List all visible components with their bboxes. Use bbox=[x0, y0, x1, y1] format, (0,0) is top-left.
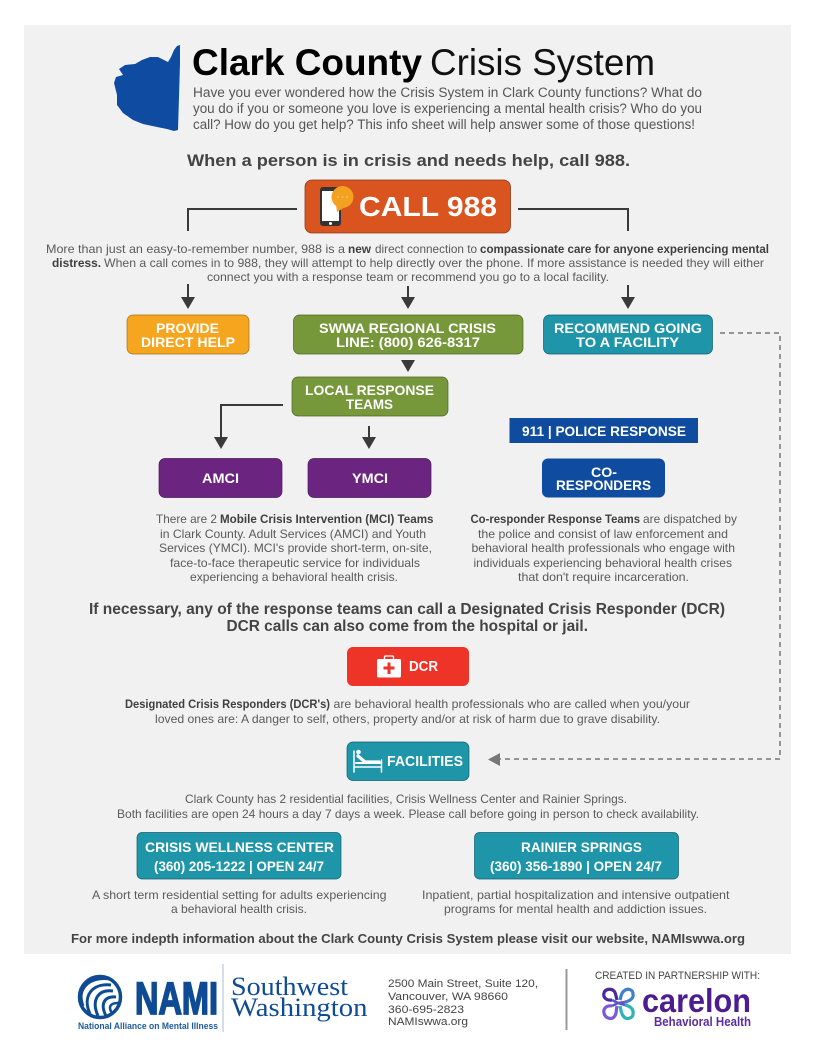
box: crisis wellness center: (360) 205-1222 | OPEN 24/7 bbox=[154, 858, 324, 874]
box: facilities bbox=[347, 742, 469, 780]
box: local response teams: TEAMS bbox=[346, 396, 393, 412]
text: more information: For more indepth information about the Clark County Crisis System please visit our website, NAMIswwa.org bbox=[71, 931, 745, 946]
text: address: Vancouver, WA 98660 bbox=[388, 991, 508, 1003]
intro text bbox=[193, 85, 702, 132]
text: rainier springs description: programs for mental health and addiction issues. bbox=[444, 902, 707, 916]
text: crisis wellness description: a behavioral health crisis. bbox=[171, 902, 307, 916]
text: 988 description: More than just an easy-to-remember number, 988 is a bbox=[46, 242, 345, 256]
logo: NAMI Southwest Washington: NAMI bbox=[135, 973, 218, 1024]
arrow: to regional crisis line bbox=[401, 286, 415, 309]
icon: first aid kit bbox=[377, 656, 401, 678]
text: rainier springs description bbox=[422, 888, 730, 916]
text: 988 description: direct connection to bbox=[375, 242, 477, 256]
connector: left bracket bbox=[188, 209, 297, 231]
text: mobile crisis intervention teams: in Clark County. Adult Services (AMCI) and Youth bbox=[160, 527, 426, 541]
text: address bbox=[388, 978, 538, 1028]
text: mobile crisis intervention teams: Mobile Crisis Intervention (MCI) Teams bbox=[220, 512, 434, 526]
text: co-responder teams: Co-responder Response Teams bbox=[470, 512, 640, 526]
text: rainier springs description: Inpatient, partial hospitalization and intensive outpatient bbox=[422, 888, 730, 902]
text: co-responder teams: that don't require incarceration. bbox=[518, 570, 689, 584]
text: co-responder teams bbox=[470, 512, 737, 584]
box: crisis wellness center: CRISIS WELLNESS CENTER bbox=[145, 839, 334, 855]
text: DCR description: Designated Crisis Responders (DCR's) bbox=[125, 697, 330, 711]
connector: right bracket bbox=[518, 209, 628, 231]
logo: created in partnership with Carelon: Behavioral Health bbox=[654, 1015, 751, 1029]
heading: call 988 prompt: When a person is in crisis and needs help, call 988. bbox=[187, 151, 630, 170]
icon: NAMI circle bbox=[80, 976, 120, 1018]
arrow: to facility bbox=[621, 285, 635, 309]
intro text: call? How do you get help? This info sheet will help answer some of those questions! bbox=[193, 117, 695, 132]
text: mobile crisis intervention teams: There are 2 bbox=[156, 512, 217, 526]
box: recommend going to a facility: RECOMMEND GOING bbox=[554, 320, 702, 336]
box: provide direct help: DIRECT HELP bbox=[141, 334, 235, 350]
text: co-responder teams: are dispatched by bbox=[643, 512, 737, 526]
text: facilities description: Both facilities are open 24 hours a day 7 days a week. Please call before going in person to check availability. bbox=[117, 807, 699, 821]
logo: created in partnership with Carelon: CREATED IN PARTNERSHIP WITH: bbox=[595, 970, 760, 982]
heading: designated crisis responder: If necessary, any of the response teams can call a Designated Crisis Responder (DCR) bbox=[89, 601, 725, 618]
box: recommend going to a facility bbox=[544, 315, 712, 354]
intro text: Have you ever wondered how the Crisis System in Clark County functions? What do bbox=[193, 85, 702, 100]
text: mobile crisis intervention teams: face-to-face therapeutic service for individuals bbox=[170, 556, 420, 570]
logo: NAMI Southwest Washington: Washington bbox=[231, 993, 368, 1022]
text: DCR description bbox=[125, 697, 690, 726]
text: 988 description: compassionate care for anyone experiencing mental bbox=[480, 242, 769, 256]
icon: Clark County map bbox=[114, 45, 180, 131]
logo: created in partnership with Carelon: carelon bbox=[642, 982, 751, 1019]
box: AMCI: AMCI bbox=[202, 470, 239, 486]
box: YMCI: YMCI bbox=[352, 470, 388, 486]
title: Clark County bbox=[192, 41, 422, 83]
text: mobile crisis intervention teams: Services (YMCI). MCI's provide short-term, on-site, bbox=[159, 541, 432, 555]
text: address: NAMIswwa.org bbox=[388, 1016, 468, 1028]
box: provide direct help bbox=[127, 315, 249, 354]
logo: created in partnership with Carelon bbox=[595, 970, 760, 1029]
box: SWWA regional crisis line bbox=[294, 315, 523, 354]
text: co-responder teams: the police and consist of law enforcement and bbox=[478, 527, 728, 541]
text: address: 2500 Main Street, Suite 120, bbox=[388, 978, 538, 990]
arrow: to direct help bbox=[181, 284, 195, 309]
text: mobile crisis intervention teams bbox=[156, 512, 434, 584]
arrow: crisis line to local teams bbox=[401, 360, 415, 372]
text: facilities description bbox=[117, 792, 699, 821]
logo: NAMI Southwest Washington: Southwest bbox=[231, 972, 349, 1001]
text: 988 description: distress. bbox=[52, 256, 101, 270]
text: 988 description: When a call comes in to 988, they will attempt to help directly over the phone. If more assistance is needed they will either bbox=[104, 256, 764, 270]
box: rainier springs: RAINIER SPRINGS bbox=[521, 839, 642, 855]
logo: NAMI Southwest Washington bbox=[78, 964, 368, 1032]
box: recommend going to a facility: TO A FACILITY bbox=[576, 334, 680, 350]
text: crisis wellness description: A short term residential setting for adults experiencing bbox=[92, 888, 386, 902]
text: address: 360-695-2823 bbox=[388, 1004, 464, 1016]
box: rainier springs bbox=[474, 832, 678, 879]
text: DCR description: loved ones are: A danger to self, others, property and/or at risk of harm due to grave disability. bbox=[155, 712, 660, 726]
text: co-responder teams: individuals experiencing behavioral health crises bbox=[474, 556, 732, 570]
text: facilities description: Clark County has 2 residential facilities, Crisis Wellness Center and Rainier Springs. bbox=[185, 792, 627, 806]
box: local response teams: LOCAL RESPONSE bbox=[305, 382, 434, 398]
box: DCR bbox=[347, 647, 469, 686]
text: mobile crisis intervention teams: experiencing a behavioral health crisis. bbox=[190, 570, 398, 584]
box: co-responders bbox=[542, 458, 665, 498]
text: DCR description: are behavioral health professionals who are called when you/your bbox=[334, 697, 690, 711]
text: 988 description bbox=[46, 242, 769, 284]
arrow: to YMCI bbox=[362, 426, 376, 449]
title bbox=[192, 41, 655, 83]
heading: designated crisis responder bbox=[89, 601, 725, 635]
box: SWWA regional crisis line: SWWA REGIONAL CRISIS bbox=[319, 320, 496, 336]
call 988 button bbox=[305, 180, 510, 233]
icon: phone with speech bubble bbox=[320, 186, 354, 226]
dashed arrow: facility to facilities bbox=[488, 333, 780, 766]
box: AMCI bbox=[159, 458, 282, 498]
icon: hospital bed bbox=[354, 750, 382, 772]
box: co-responders: CO- bbox=[591, 464, 617, 480]
box: SWWA regional crisis line: LINE: (800) 626-8317 bbox=[336, 334, 480, 350]
box: co-responders: RESPONDERS bbox=[556, 477, 651, 493]
heading: designated crisis responder: DCR calls can also come from the hospital or jail. bbox=[226, 618, 588, 635]
box: DCR: DCR bbox=[409, 659, 438, 675]
text: 988 description: new bbox=[348, 242, 372, 256]
box: facilities: FACILITIES bbox=[387, 754, 463, 770]
icon: Carelon clover bbox=[604, 989, 633, 1018]
box: 911 police response: 911 | POLICE RESPONSE bbox=[522, 423, 686, 439]
box: local response teams bbox=[292, 377, 448, 416]
text: 988 description: connect you with a response team or recommend you go to a local facility. bbox=[207, 270, 609, 284]
text: co-responder teams: behavioral health professionals who engage with bbox=[472, 541, 735, 555]
box: YMCI bbox=[308, 458, 431, 498]
call 988 button: CALL 988 bbox=[359, 191, 497, 222]
arrow: to AMCI bbox=[214, 405, 283, 449]
title: Crisis System bbox=[430, 41, 655, 83]
text: crisis wellness description bbox=[92, 888, 386, 916]
box: provide direct help: PROVIDE bbox=[156, 320, 219, 336]
box: crisis wellness center bbox=[137, 832, 341, 879]
intro text: you do if you or someone you love is experiencing a mental health crisis? Who do you bbox=[193, 101, 702, 116]
box: rainier springs: (360) 356-1890 | OPEN 24/7 bbox=[490, 858, 662, 874]
box: 911 police response bbox=[510, 418, 698, 443]
logo: NAMI Southwest Washington: National Alliance on Mental Illness bbox=[78, 1021, 218, 1032]
